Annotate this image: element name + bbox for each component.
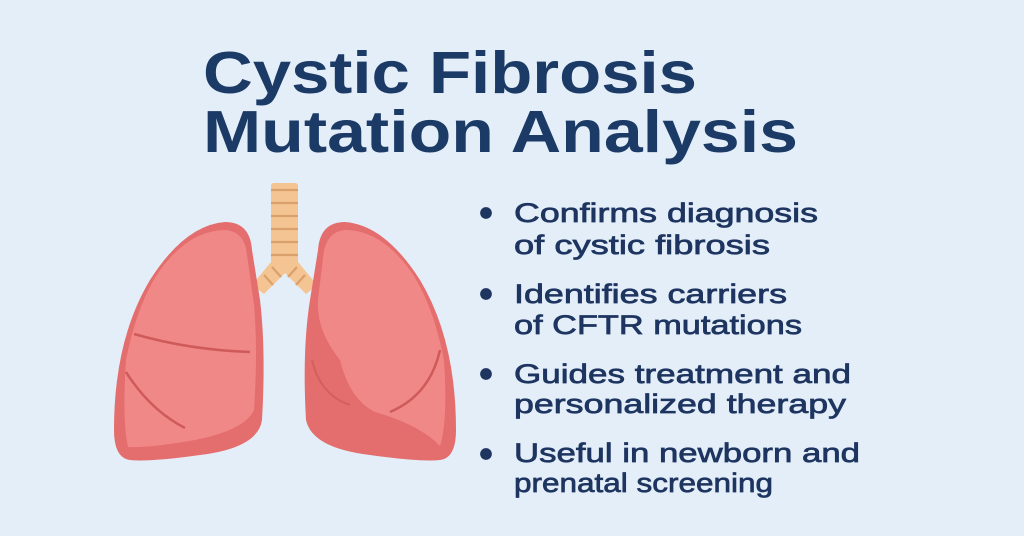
bullet 3: Guides treatment and [514,359,851,389]
bullet 3: personalized therapy [514,389,847,419]
trachea [252,183,317,294]
left lung [114,222,264,460]
bullet list [480,198,860,498]
bullet 2: of CFTR mutations [514,310,802,340]
bullet 1: of cystic fibrosis [514,230,770,260]
bullet 1: Confirms diagnosis [514,198,818,228]
illustration: lungs [114,183,456,460]
bullet 2: Identifies carriers [514,279,787,309]
bullet 4 [480,438,860,498]
title: Cystic Fibrosis [203,40,697,106]
bullet 1 [480,198,818,260]
bullet 4: prenatal screening [514,468,773,498]
title: Mutation Analysis [203,99,798,165]
bullet 2 [480,279,802,340]
bullet 4: Useful in newborn and [514,438,860,468]
title [203,40,798,165]
right lung [305,222,456,460]
bullet 3 [480,359,851,419]
